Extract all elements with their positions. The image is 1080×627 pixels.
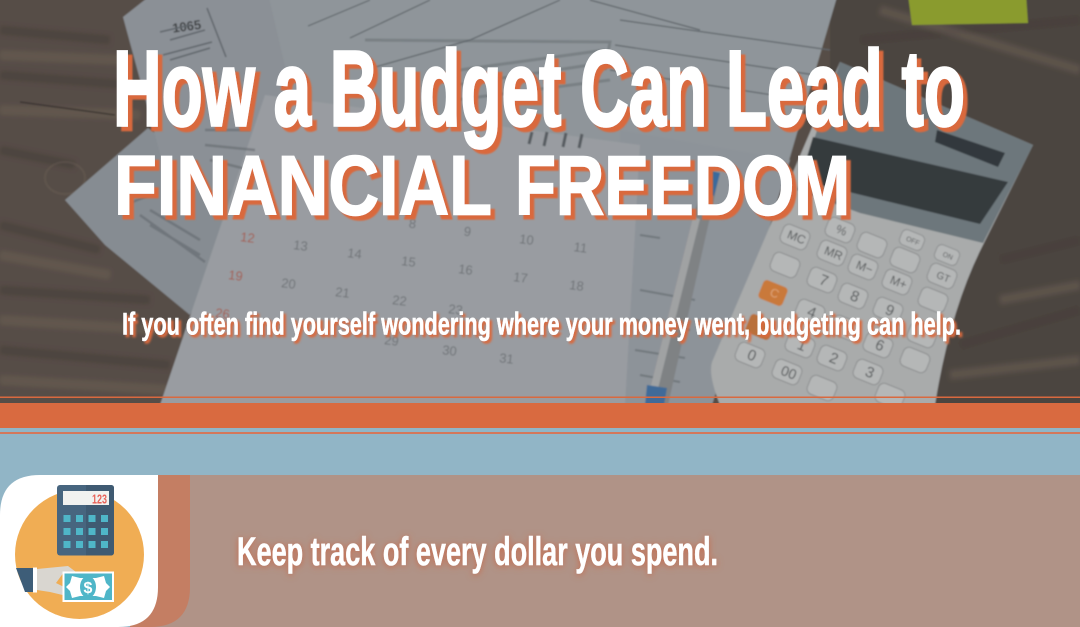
calendar dates: 14 <box>346 245 363 262</box>
key labels: 2 <box>827 349 841 368</box>
key labels: GT <box>934 270 951 285</box>
keys <box>733 215 961 411</box>
paper: top left form <box>122 0 288 188</box>
spiral binding <box>527 131 584 149</box>
key labels: ON <box>941 251 954 262</box>
icon: calculator and hand with money <box>15 485 144 619</box>
calculator body <box>57 485 114 556</box>
calendar dates: 17 <box>512 269 529 286</box>
paper: top middle form <box>499 0 838 234</box>
calendar dates: 9 <box>463 224 472 239</box>
key labels: C <box>768 285 781 302</box>
banknote <box>62 572 114 602</box>
key labels <box>745 222 954 383</box>
key labels: 8 <box>848 287 862 306</box>
brown panel background <box>140 475 1080 627</box>
paper: left form <box>65 128 250 315</box>
key labels: 1 <box>795 336 809 355</box>
form 1065 label: 1065 <box>171 17 202 36</box>
key labels: 6 <box>873 336 887 355</box>
calculator <box>711 62 1033 411</box>
calendar dates: 8 <box>408 216 417 231</box>
hand <box>37 566 76 597</box>
calendar dates: 15 <box>400 253 417 270</box>
calculator display <box>800 137 1008 224</box>
calendar dates: 10 <box>518 231 535 248</box>
calendar dates: 26 <box>214 305 231 322</box>
title: Financial Freedom <box>114 138 850 232</box>
icon: calculator and hand with money: $ <box>84 580 93 597</box>
sleeve <box>16 568 33 592</box>
title: Financial Freedom: FREEDOM <box>515 138 850 232</box>
blue band <box>0 434 1080 475</box>
calendar dates: 20 <box>280 275 297 292</box>
calendar dates: 11 <box>573 239 588 256</box>
green sticky note <box>906 0 1028 25</box>
form details <box>125 0 830 382</box>
calendar sheet <box>160 95 640 405</box>
icon: calculator and hand with money: 123 <box>92 492 107 506</box>
key labels: MR <box>822 243 845 263</box>
calculator screen <box>63 491 109 505</box>
calendar dates: 29 <box>383 332 400 349</box>
calendar dates: 30 <box>441 342 458 359</box>
tip text: Keep track of every dollar you spend. <box>237 530 718 574</box>
calendar dates: 16 <box>457 261 474 278</box>
key labels: M+ <box>888 273 909 292</box>
wooden desk <box>0 0 1080 420</box>
key labels: 3 <box>863 363 877 382</box>
orange divider bands <box>0 396 1080 434</box>
key labels: % <box>834 222 849 239</box>
key labels: 7 <box>817 271 831 290</box>
calendar dates: 18 <box>568 277 585 294</box>
key labels: 4 <box>805 303 819 322</box>
calendar dates <box>214 216 588 367</box>
key labels: 0 <box>745 346 759 365</box>
calendar dates: 31 <box>498 350 515 367</box>
calendar dates: 23 <box>447 301 464 318</box>
orange-brown tab <box>130 475 190 627</box>
calendar dates: 13 <box>292 237 309 254</box>
panel: tip row <box>0 475 1080 627</box>
key labels: 9 <box>883 301 897 320</box>
solar panel <box>935 130 1005 167</box>
calendar dates: 19 <box>227 267 244 284</box>
pen <box>645 170 720 405</box>
key labels: M− <box>854 258 875 277</box>
calendar dates: 21 <box>334 284 351 301</box>
key labels: MC <box>785 227 808 247</box>
calendar dates: 22 <box>391 292 408 309</box>
key labels: OFF <box>905 236 920 247</box>
key labels: 00 <box>779 362 799 383</box>
background photo: desk with papers and calculator <box>0 0 1080 420</box>
calendar dates: 12 <box>239 229 256 246</box>
calculator keys <box>64 515 108 548</box>
white icon tile <box>0 475 158 627</box>
orange C key <box>757 279 789 307</box>
paper: right form <box>624 160 790 403</box>
title: Financial Freedom: FINANCIAL <box>114 138 492 232</box>
